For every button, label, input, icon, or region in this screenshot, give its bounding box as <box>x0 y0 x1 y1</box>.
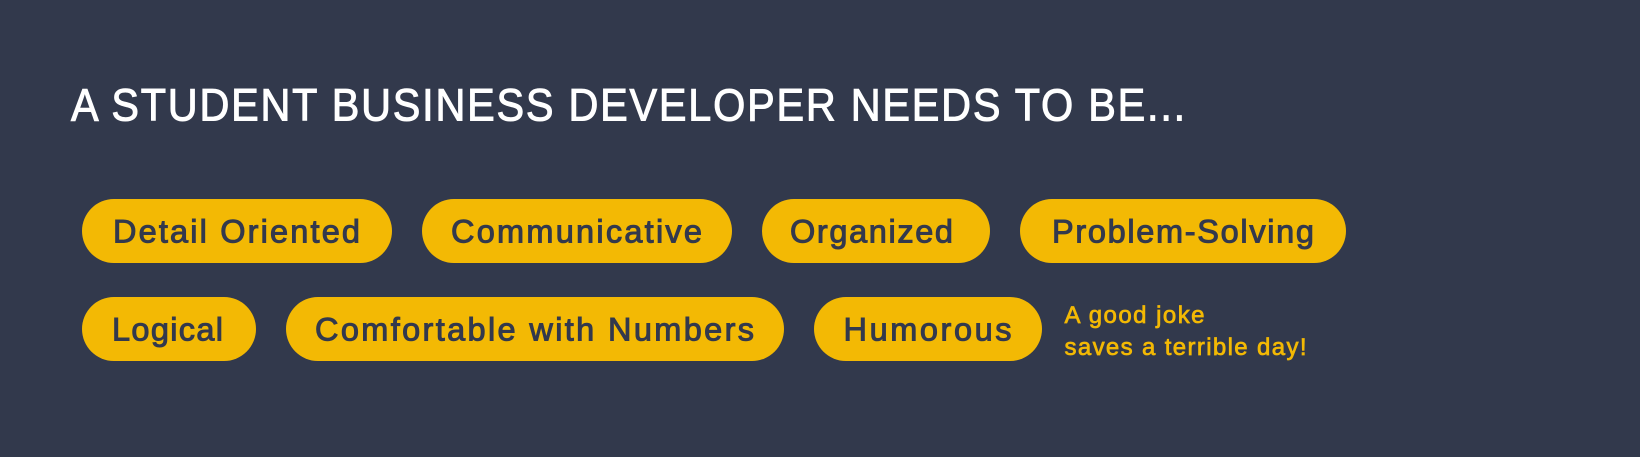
pill: Problem-Solving <box>1020 199 1346 263</box>
pill: Logical <box>82 297 256 361</box>
note: joke caption: saves a terrible day! <box>1064 334 1306 361</box>
pill: Organized: Organized <box>790 214 953 250</box>
pill: Logical: Logical <box>112 312 223 348</box>
pill: Humorous: Humorous <box>844 312 1012 348</box>
note: joke caption <box>1064 302 1306 361</box>
title: A STUDENT BUSINESS DEVELOPER NEEDS TO BE... <box>71 81 1185 131</box>
pill: Humorous <box>814 297 1042 361</box>
pill: Detail Oriented <box>82 199 392 263</box>
pill: Comfortable with Numbers: Comfortable with Numbers <box>315 312 754 348</box>
pill: Comfortable with Numbers <box>286 297 784 361</box>
pill: Communicative <box>422 199 732 263</box>
pill: Communicative: Communicative <box>451 214 702 250</box>
pill: Problem-Solving: Problem-Solving <box>1052 214 1314 250</box>
note: joke caption: A good joke <box>1064 302 1204 329</box>
pill: Detail Oriented: Detail Oriented <box>113 214 360 250</box>
pill: Organized <box>762 199 990 263</box>
